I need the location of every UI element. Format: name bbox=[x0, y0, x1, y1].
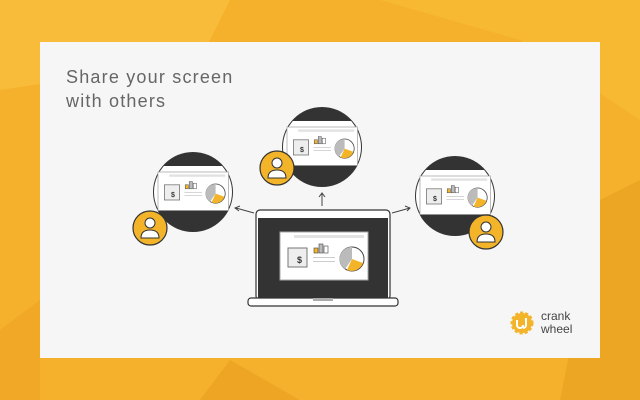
title: Share your screen bbox=[66, 67, 233, 87]
logo: crank bbox=[541, 309, 571, 323]
avatars bbox=[133, 151, 503, 249]
laptop bbox=[248, 210, 398, 306]
laptop: $ bbox=[297, 255, 302, 265]
circle: left: $ bbox=[171, 192, 175, 199]
circle: right: $ bbox=[433, 196, 437, 203]
circle: left bbox=[151, 152, 235, 232]
circle: right bbox=[413, 156, 497, 236]
text: with others bbox=[65, 91, 166, 111]
logo bbox=[512, 309, 572, 336]
card bbox=[40, 42, 600, 358]
circle: center bbox=[280, 107, 364, 187]
logo: wheel bbox=[540, 322, 572, 336]
circle: center: $ bbox=[300, 147, 304, 154]
arrows bbox=[235, 193, 410, 213]
